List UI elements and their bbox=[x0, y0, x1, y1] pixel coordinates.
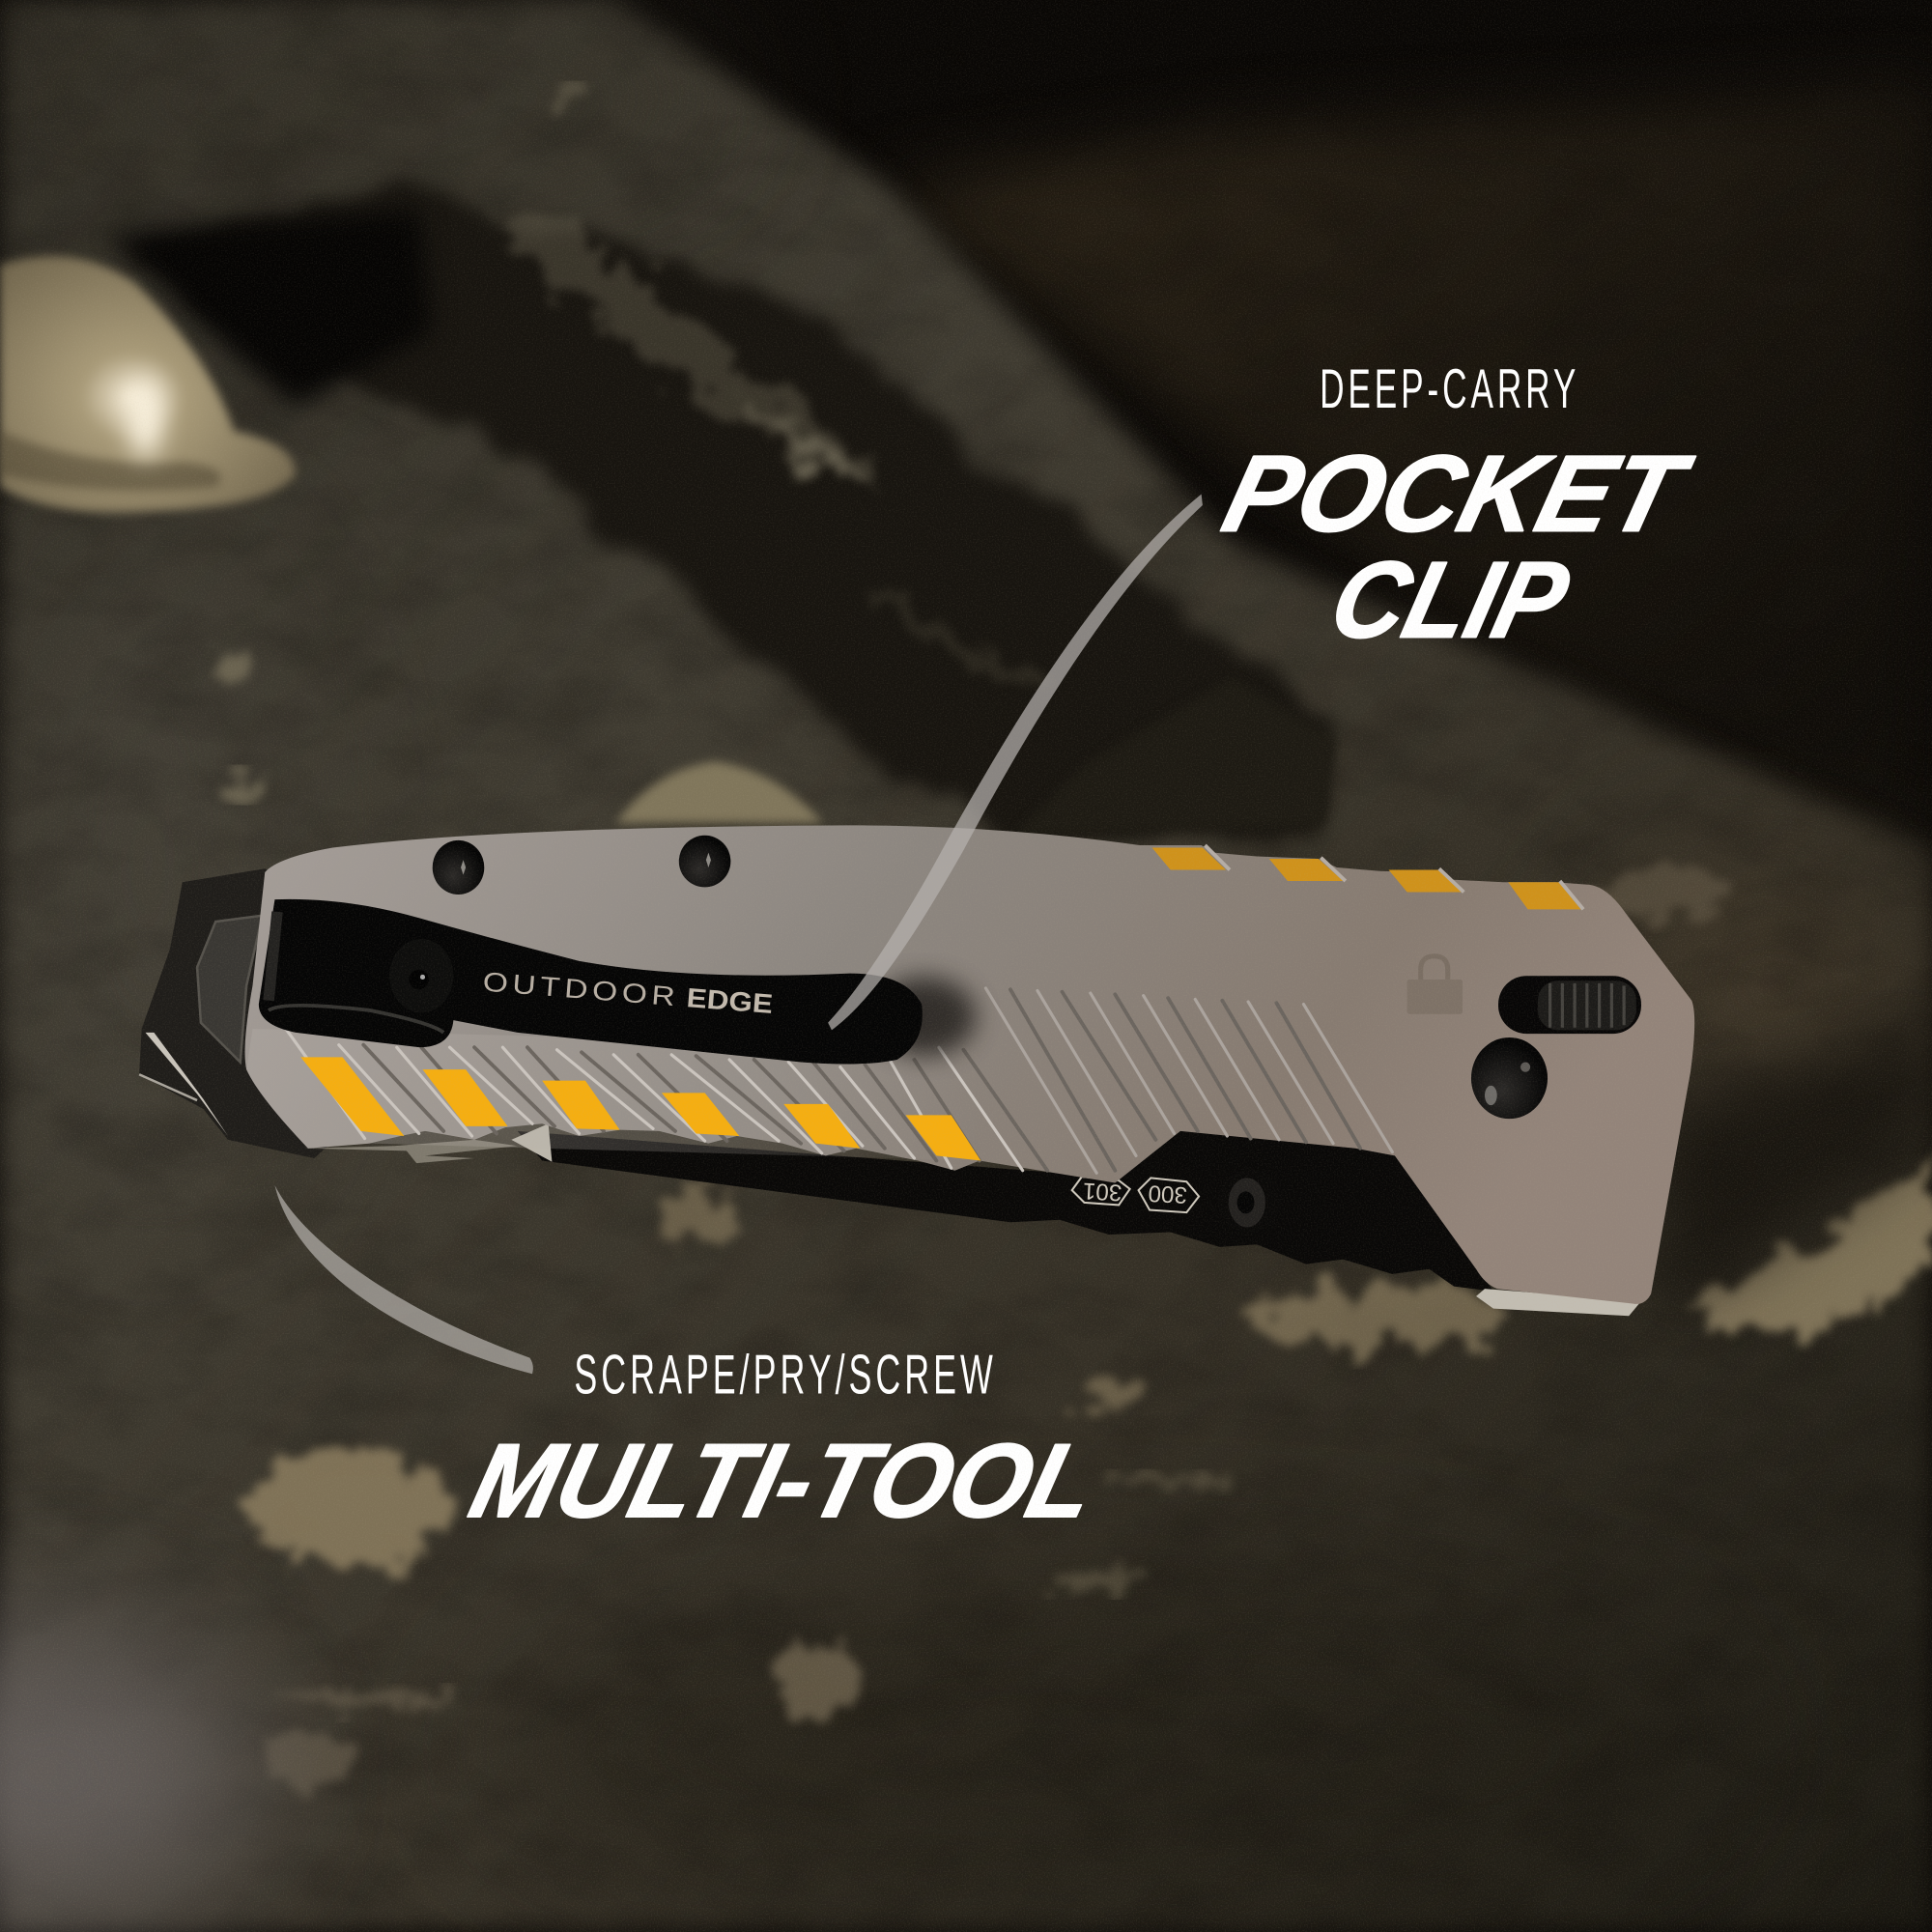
blade stamp: 300: 300 bbox=[1148, 1179, 1188, 1208]
clip logo text: OUTDOOR bbox=[482, 967, 681, 1011]
heading: clip: CLIP bbox=[1320, 540, 1580, 661]
background: shadow to right of knife bbox=[1663, 1023, 1932, 1306]
blade stamp: 300 bbox=[1139, 1178, 1199, 1212]
lock slider bbox=[1498, 976, 1641, 1034]
label: deep-carry: DEEP-CARRY bbox=[1320, 358, 1579, 420]
blade stamp: 301: 301 bbox=[1082, 1178, 1122, 1206]
background: cool glow lower left bbox=[0, 1620, 259, 1928]
steel liner at butt bbox=[1476, 1289, 1641, 1316]
pocket clip bbox=[259, 899, 976, 1065]
clip logo text bbox=[482, 967, 774, 1019]
label: scrape/pry/screw: SCRAPE/PRY/SCREW bbox=[574, 1345, 997, 1406]
top yellow inlays bbox=[1152, 848, 1580, 909]
handle body bbox=[245, 825, 1694, 1304]
handle screw right bbox=[679, 836, 730, 887]
background: brass rivet bbox=[0, 210, 431, 512]
blade stamp: 301 bbox=[1072, 1177, 1130, 1206]
clip logo text: EDGE bbox=[686, 982, 774, 1019]
handle screw left bbox=[433, 840, 484, 895]
background: worn strap bbox=[111, 185, 1341, 838]
clip screw bbox=[389, 939, 453, 1012]
lower-left handle highlight bbox=[246, 1029, 980, 1161]
heading: pocket: POCKET bbox=[1212, 434, 1702, 554]
callout line: pocket clip bbox=[828, 494, 1203, 1030]
bottom yellow inlays bbox=[300, 1057, 980, 1161]
blade bbox=[511, 1123, 1493, 1292]
heading: multi-tool: MULTI-TOOL bbox=[460, 1423, 1108, 1540]
pivot pin bbox=[1217, 1169, 1282, 1234]
knife bbox=[139, 825, 1694, 1316]
multi-tool tip bbox=[139, 868, 518, 1163]
callout line: multi-tool bbox=[274, 1185, 533, 1374]
background: dust patches bbox=[220, 90, 1932, 1783]
handle screw rear bbox=[1471, 1037, 1548, 1119]
background: stone behind knife bbox=[616, 761, 823, 823]
grip ribs bbox=[286, 988, 1392, 1173]
top inlay highlights bbox=[1205, 845, 1583, 909]
lock icon bbox=[1407, 956, 1463, 1014]
